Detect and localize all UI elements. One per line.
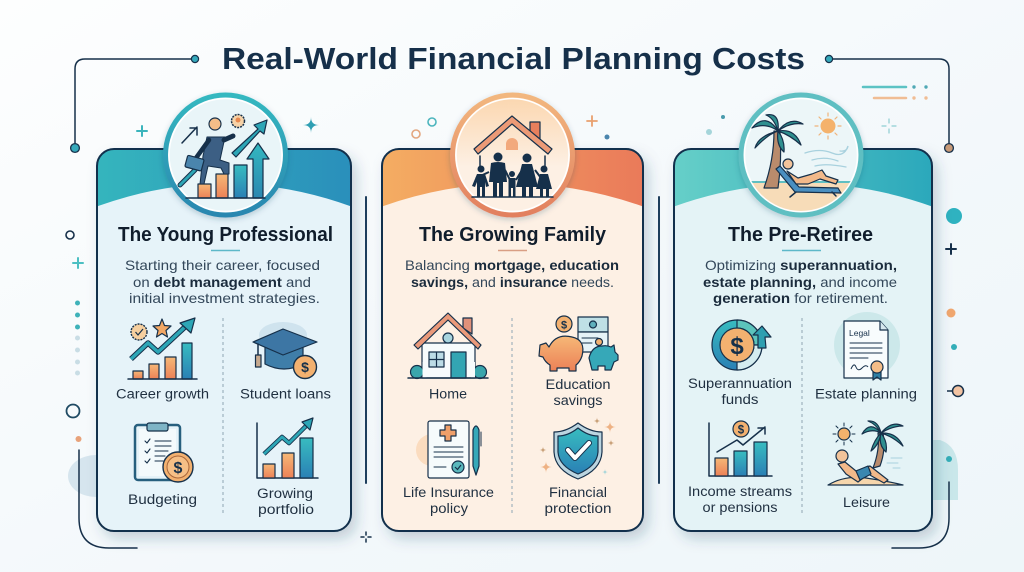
- heading: The Pre-Retiree: [728, 224, 873, 246]
- panel: The Young Professional: [90, 95, 358, 531]
- connector: top left: [71, 55, 199, 152]
- decorative marks right: [946, 208, 964, 462]
- item: Financial protection: protection: [544, 501, 612, 516]
- panel: The Pre-Retiree: [667, 95, 939, 531]
- item: Income streams or pensions: Income streams: [688, 484, 792, 499]
- connector: top right: [825, 55, 953, 152]
- item: Superannuation funds: [688, 320, 792, 407]
- item: Growing portfolio: Growing: [257, 486, 313, 501]
- item: Budgeting: Budgeting: [128, 492, 197, 507]
- item: Home: [408, 313, 488, 402]
- decorative blob right: [925, 440, 958, 500]
- hero icon: family home: [452, 95, 572, 215]
- item: Income streams or pensions: [688, 421, 792, 515]
- item: Leisure: [828, 421, 903, 510]
- item: Career growth: Career growth: [116, 386, 209, 402]
- decorative marks left: [66, 117, 319, 442]
- item: Life insurance policy: Life Insurance: [403, 485, 494, 500]
- item: Estate planning: Legal: [849, 328, 870, 338]
- underline: [498, 250, 527, 252]
- connector: bottom left: [79, 450, 137, 548]
- description: [703, 257, 897, 306]
- item: Financial protection: [540, 418, 616, 516]
- item: Life insurance policy: policy: [430, 501, 468, 516]
- divider right: [658, 197, 660, 483]
- hero icon: beach retirement: [741, 95, 861, 218]
- item: Student loans: Student loans: [240, 386, 331, 402]
- decorative blob left: [68, 455, 124, 497]
- description: generation for retirement.: [713, 290, 888, 306]
- item: Home: Home: [429, 386, 467, 402]
- description: [405, 257, 619, 290]
- panel: The Growing Family: [375, 95, 650, 531]
- heading: The Growing Family: [419, 224, 607, 246]
- item: Career growth: [116, 318, 209, 402]
- item: Leisure: Leisure: [843, 495, 890, 510]
- description: [125, 257, 320, 306]
- description: on debt management and: [133, 274, 311, 290]
- item: Education savings: Education: [546, 377, 610, 392]
- connector: bottom right: [892, 482, 949, 548]
- decorative marks center: [412, 115, 896, 140]
- description: Starting their career, focused: [125, 257, 320, 273]
- item: Income streams or pensions: $: [738, 424, 745, 436]
- item: Budgeting: [128, 423, 197, 507]
- item: Superannuation funds: $: [730, 333, 744, 360]
- item: Estate planning: [815, 312, 917, 402]
- item: Budgeting: $: [174, 460, 183, 477]
- item: Growing portfolio: [257, 418, 318, 517]
- item: Student loans: $: [301, 359, 309, 375]
- item: Education savings: $: [561, 320, 567, 332]
- item: Life insurance policy: [403, 421, 494, 516]
- heading: The Young Professional: [118, 224, 333, 246]
- hero icon: young professional: [166, 95, 286, 215]
- description: Optimizing superannuation,: [705, 257, 897, 273]
- description: estate planning, and income: [703, 274, 897, 290]
- title: Real-World Financial Planning Costs: [222, 41, 805, 76]
- description: savings, and insurance needs.: [411, 274, 614, 290]
- underline: [211, 250, 240, 252]
- item: Growing portfolio: portfolio: [258, 502, 314, 517]
- item: Financial protection: Financial: [549, 485, 607, 500]
- item: Education savings: savings: [554, 393, 603, 408]
- underline: [782, 250, 821, 252]
- item: Superannuation funds: funds: [722, 392, 759, 407]
- description: initial investment strategies.: [129, 290, 320, 306]
- description: Balancing mortgage, education: [405, 257, 619, 273]
- divider left: [365, 197, 367, 483]
- decorative plus bottom: [361, 532, 371, 542]
- item: Income streams or pensions: or pensions: [702, 500, 778, 515]
- accent lines top right: [863, 85, 928, 100]
- item: Superannuation funds: Superannuation: [688, 376, 792, 391]
- item: Student loans: [240, 322, 331, 402]
- item: Estate planning: Estate planning: [815, 386, 917, 402]
- item: Education savings: [539, 316, 618, 408]
